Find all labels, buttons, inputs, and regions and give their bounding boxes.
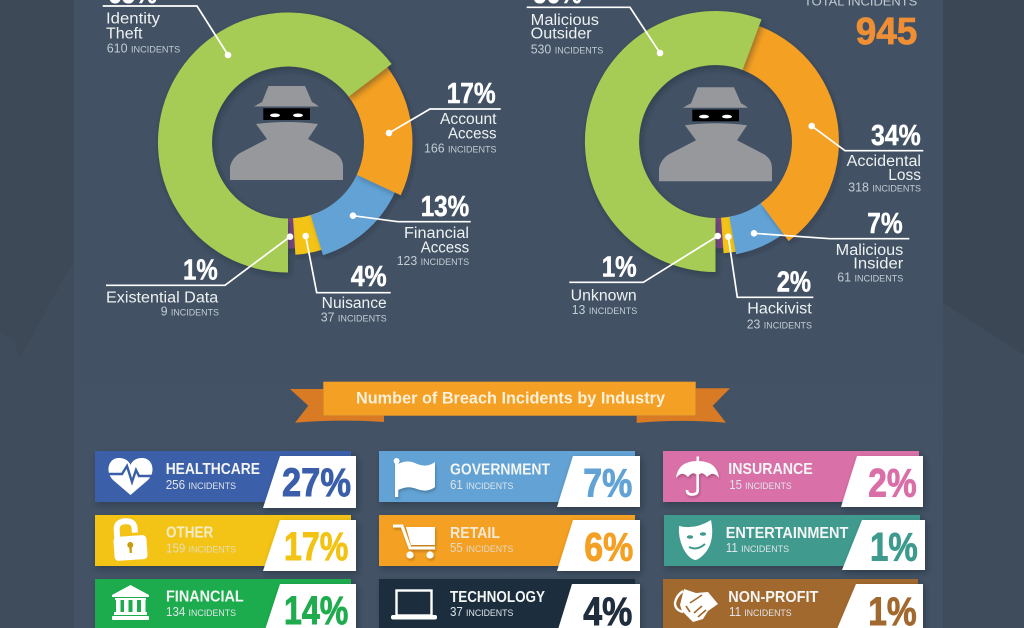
slice: identity theft — [158, 12, 392, 273]
callout: account access: Account — [440, 111, 497, 128]
callout: account access: 166 INCIDENTS — [424, 141, 496, 156]
card: insurance: 2% — [868, 462, 917, 506]
callout: accidental loss: Accidental — [847, 153, 921, 170]
slice: malicious outsider — [585, 11, 762, 272]
icon: spy left — [230, 86, 343, 180]
card: government — [379, 451, 640, 507]
icon: heart — [108, 458, 153, 495]
chart: breach types donut — [158, 12, 412, 273]
card: government: 7% — [583, 462, 632, 506]
card: healthcare: HEALTHCARE — [166, 461, 260, 478]
slice: nuisance — [293, 213, 330, 255]
card: non-profit: NON-PROFIT — [728, 589, 819, 606]
card: other: 159 INCIDENTS — [166, 541, 236, 555]
callout: accidental loss: 318 INCIDENTS — [848, 180, 921, 195]
card: healthcare — [95, 451, 356, 508]
card: retail: 6% — [584, 526, 633, 570]
callout: hackivist: 2% — [777, 267, 811, 299]
card: insurance — [663, 451, 923, 507]
callout: nuisance: 4% — [351, 261, 387, 293]
callout: financial access — [350, 191, 471, 268]
card: healthcare: 27% — [282, 461, 351, 505]
callout: malicious insider — [751, 208, 909, 285]
callout: unknown: Unknown — [571, 288, 637, 305]
callout: accidental loss: Loss — [888, 167, 921, 184]
card: government: GOVERNMENT — [450, 462, 550, 479]
card: retail: 55 INCIDENTS — [450, 541, 513, 555]
slice: unknown — [716, 218, 723, 248]
callout: account access: 17% — [447, 78, 496, 110]
card: retail: RETAIL — [450, 525, 500, 542]
callout: financial access: 13% — [421, 191, 469, 223]
card: insurance: 15 INCIDENTS — [729, 478, 792, 492]
card: insurance: INSURANCE — [728, 461, 813, 478]
heading ribbon: number of breach incidents by industry: Number of Breach Incidents by Industry — [356, 389, 666, 407]
card: healthcare: 256 INCIDENTS — [166, 478, 236, 492]
slice: accidental loss — [739, 24, 839, 241]
callout: malicious insider: 61 INCIDENTS — [837, 270, 903, 285]
callout: identity theft: 610 INCIDENTS — [107, 41, 180, 56]
callout: existential data: 9 INCIDENTS — [161, 304, 219, 319]
card: technology — [379, 579, 640, 628]
callout: nuisance — [302, 233, 391, 325]
callout: hackivist: 23 INCIDENTS — [747, 316, 812, 331]
card: financial: FINANCIAL — [166, 589, 244, 606]
icon: flag — [394, 458, 435, 497]
chart: threat actors donut — [585, 11, 839, 272]
icon: padlock — [112, 520, 148, 561]
icon: handshake — [675, 589, 718, 622]
callout: financial access: Access — [421, 240, 469, 257]
card: government: 61 INCIDENTS — [450, 478, 513, 492]
slice: malicious insider — [729, 199, 791, 254]
card: non-profit: 11 INCIDENTS — [729, 605, 792, 619]
callout: identity theft — [103, 0, 231, 58]
callout: account access: Access — [448, 126, 497, 143]
card: financial: 134 INCIDENTS — [166, 605, 236, 619]
card: other: 17% — [284, 525, 348, 569]
card: non-profit — [663, 579, 923, 628]
card: technology: TECHNOLOGY — [450, 589, 546, 606]
callout: identity theft: Theft — [106, 26, 143, 42]
callout: account access — [386, 78, 501, 156]
total incidents: 945 — [856, 11, 917, 53]
callout: existential data: Existential Data — [106, 289, 219, 306]
callout: malicious insider: 7% — [867, 208, 903, 240]
callout: unknown: 13 INCIDENTS — [572, 302, 637, 317]
callout: existential data — [106, 233, 293, 319]
icon: theatre mask — [679, 520, 712, 560]
callout: unknown: 1% — [602, 252, 637, 284]
callout: financial access: 123 INCIDENTS — [397, 253, 469, 268]
card: retail — [379, 515, 640, 571]
callout: malicious outsider: Malicious — [531, 12, 599, 29]
callout: malicious outsider — [527, 0, 663, 56]
card: technology: 37 INCIDENTS — [450, 605, 513, 619]
callout: malicious outsider: 530 INCIDENTS — [531, 41, 603, 56]
icon: umbrella — [676, 456, 719, 494]
total incidents — [804, 0, 918, 53]
slice: financial access — [311, 170, 398, 255]
callout: nuisance: 37 INCIDENTS — [321, 310, 387, 325]
callout: existential data: 1% — [183, 254, 218, 286]
callout: unknown — [569, 233, 721, 317]
slice: existential data — [288, 218, 296, 249]
card: entertainment — [664, 515, 925, 570]
heading ribbon: number of breach incidents by industry — [290, 382, 730, 423]
callout: identity theft: Identity — [106, 10, 160, 28]
callout: malicious outsider: Outsider — [531, 25, 592, 42]
card: entertainment: ENTERTAINMENT — [726, 525, 849, 542]
callout: financial access: Financial — [404, 225, 469, 242]
callout: malicious insider: Malicious — [836, 242, 904, 259]
card: other — [95, 515, 356, 571]
icon: bank — [112, 585, 149, 620]
card: entertainment: 11 INCIDENTS — [726, 541, 789, 555]
callout: accidental loss: 34% — [871, 120, 921, 152]
card: other: OTHER — [166, 525, 213, 542]
icon: laptop — [391, 590, 437, 620]
slice: account access — [348, 66, 412, 195]
icon: spy right — [659, 87, 772, 181]
callout: hackivist: Hackivist — [747, 300, 812, 317]
callout: hackivist — [725, 233, 813, 331]
icon: shopping cart — [393, 526, 435, 559]
callout: nuisance: Nuisance — [322, 295, 387, 312]
card: entertainment: 1% — [870, 526, 918, 570]
callout: accidental loss — [808, 120, 923, 195]
callout: malicious insider: Insider — [853, 255, 903, 272]
card: financial — [95, 579, 356, 628]
slice: hackivist — [721, 216, 743, 253]
